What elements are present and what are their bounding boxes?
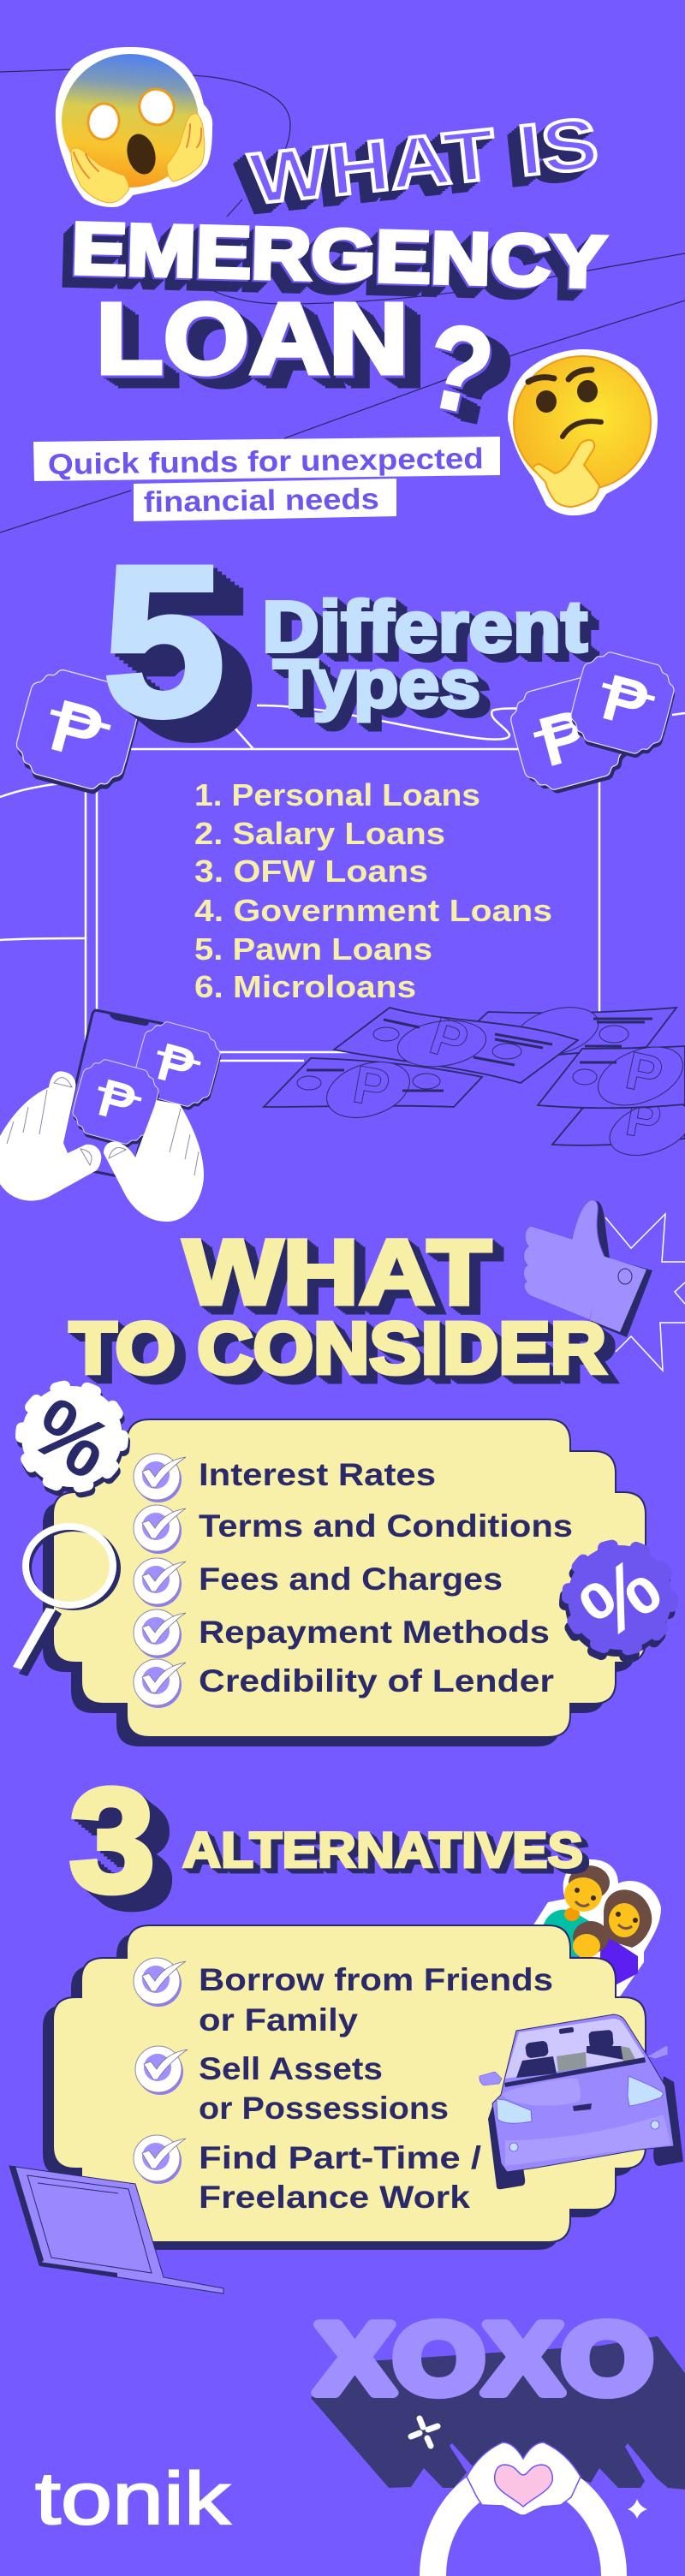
list: alternatives: [134, 1958, 553, 2215]
list text: Terms and Conditions: [199, 1508, 573, 1544]
icon: right peso coins: P: [595, 661, 656, 742]
list: loan types: 4. Government Loans: [194, 893, 552, 928]
list: loan types: 1. Personal Loans: [194, 777, 480, 812]
illustration: phone and hands: [0, 1010, 226, 1222]
heading: Different: Different: [262, 586, 587, 667]
peso sign: P: [152, 1032, 201, 1098]
panel: what to consider: [13, 1200, 685, 1746]
icon: coin on phone: [128, 1017, 226, 1115]
list: loan types: 5. Pawn Loans: [194, 931, 432, 967]
heart: [495, 2465, 552, 2507]
hands: [467, 2442, 581, 2515]
tonik logo: tonik: [35, 2458, 231, 2540]
heading: LOAN: LOAN: [96, 283, 408, 396]
list text: Borrow from Friends: [199, 1962, 553, 1997]
card: considerations: [43, 1419, 646, 1746]
list: loan types: 6. Microloans: [194, 969, 416, 1004]
list: loan types: 2. Salary Loans: [194, 816, 445, 851]
icon: thinking face sticker: [508, 349, 658, 515]
heading: EMERGENCY: EMERGENCY: [71, 208, 607, 303]
list: considerations: [134, 1454, 573, 1708]
icon: purple percent badge: %: [564, 1540, 677, 1657]
icon: sparkle: [411, 2418, 438, 2446]
icon: right peso coins: [504, 646, 682, 800]
second peso sign: P: [92, 1068, 142, 1134]
list text: Interest Rates: [199, 1457, 436, 1492]
icon: thumbs up: [523, 1200, 652, 1337]
icon: left peso coin: P: [43, 684, 111, 776]
left hand: [0, 1071, 101, 1201]
decorative white lines and frame: [0, 705, 685, 1061]
phone: [58, 1010, 168, 1179]
list text: [199, 1457, 573, 1698]
heading: ALTERNATIVES: ALTERNATIVES: [182, 1823, 583, 1878]
arms: [420, 2458, 627, 2576]
list text: Sell Assets: [199, 2051, 383, 2086]
icon: right peso coins: P: [531, 694, 597, 782]
panel: alternatives: [9, 1758, 683, 2293]
check icons: [134, 1454, 186, 1708]
icon: shocked face sticker: [56, 47, 212, 207]
icon: family sticker: [533, 1859, 661, 1999]
illustration: peso bills: P: [622, 1088, 665, 1151]
list: loan types: 3. OFW Loans: [194, 854, 428, 889]
number 3: 3: [69, 1758, 155, 1923]
list text: Credibility of Lender: [199, 1663, 554, 1698]
heading: WHAT IS: WHAT IS: [246, 103, 602, 219]
list text: or Possessions: [199, 2091, 449, 2126]
illustration: peso bills: P: [423, 1006, 475, 1074]
icon: left peso coin: [9, 663, 146, 800]
background thin lines: [0, 69, 685, 532]
illustration: peso bills: P: [621, 1041, 668, 1106]
check icons: [134, 1958, 188, 2184]
icon: second coin: [67, 1055, 164, 1152]
number 5: 5: [103, 521, 225, 760]
illustration: heart hands: [420, 2442, 627, 2576]
list: loan types: [194, 777, 552, 1004]
subtitle: Quick funds for unexpected: [48, 443, 484, 481]
right hand: [104, 1100, 204, 1222]
XOXO long shadow: [311, 2336, 685, 2490]
illustration: car: [480, 2014, 683, 2189]
heading: TO CONSIDER: TO CONSIDER: [69, 1308, 606, 1389]
subtitle: [33, 437, 500, 521]
panel: intro: [0, 47, 685, 532]
list text: Freelance Work: [199, 2180, 470, 2215]
heading: WHAT: WHAT: [183, 1220, 491, 1324]
subtitle: financial needs: [144, 483, 379, 519]
icon: diamond sparkle: [628, 2499, 647, 2519]
heading: question mark: ?: [414, 296, 504, 441]
icon: white percent badge: %: [16, 1380, 127, 1496]
finger details: [7, 1078, 199, 1175]
list text: [199, 1962, 553, 2215]
phone notch: [109, 1013, 149, 1026]
illustration: laptop: [9, 2166, 223, 2293]
list text: or Family: [199, 2002, 358, 2038]
illustration: peso bills: P: [348, 1055, 394, 1119]
card: alternatives: [43, 1925, 646, 2250]
heading: Types: Types: [273, 645, 480, 722]
XOXO heading: XOXO: [316, 2303, 652, 2414]
list text: Repayment Methods: [199, 1615, 550, 1650]
illustration: peso bills: [264, 999, 685, 1165]
panel: closing: [35, 2303, 685, 2576]
icon: magnifying glass: [13, 1526, 118, 1676]
panel: types: [0, 521, 685, 1222]
list text: Find Part-Time /: [199, 2140, 481, 2175]
list text: Fees and Charges: [199, 1562, 503, 1597]
star outline: [605, 1214, 685, 1371]
